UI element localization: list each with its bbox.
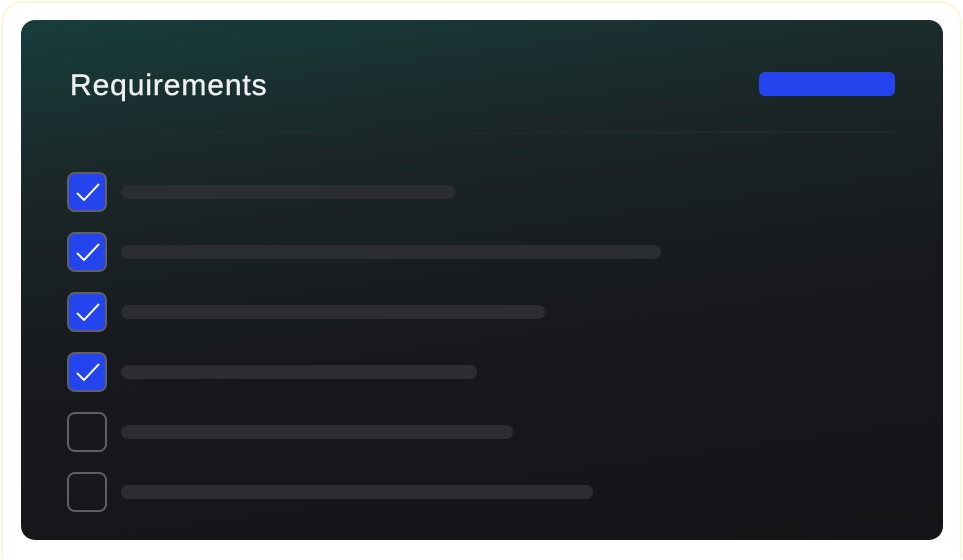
row 3 bbox=[67, 292, 545, 332]
row 2 bbox=[67, 232, 661, 272]
button: blue pill bbox=[759, 72, 895, 96]
row 6 bbox=[67, 472, 593, 512]
title: Requirements bbox=[70, 69, 268, 102]
row 4 bbox=[67, 352, 477, 392]
row 1 bbox=[67, 172, 455, 212]
row 5 bbox=[67, 412, 513, 452]
